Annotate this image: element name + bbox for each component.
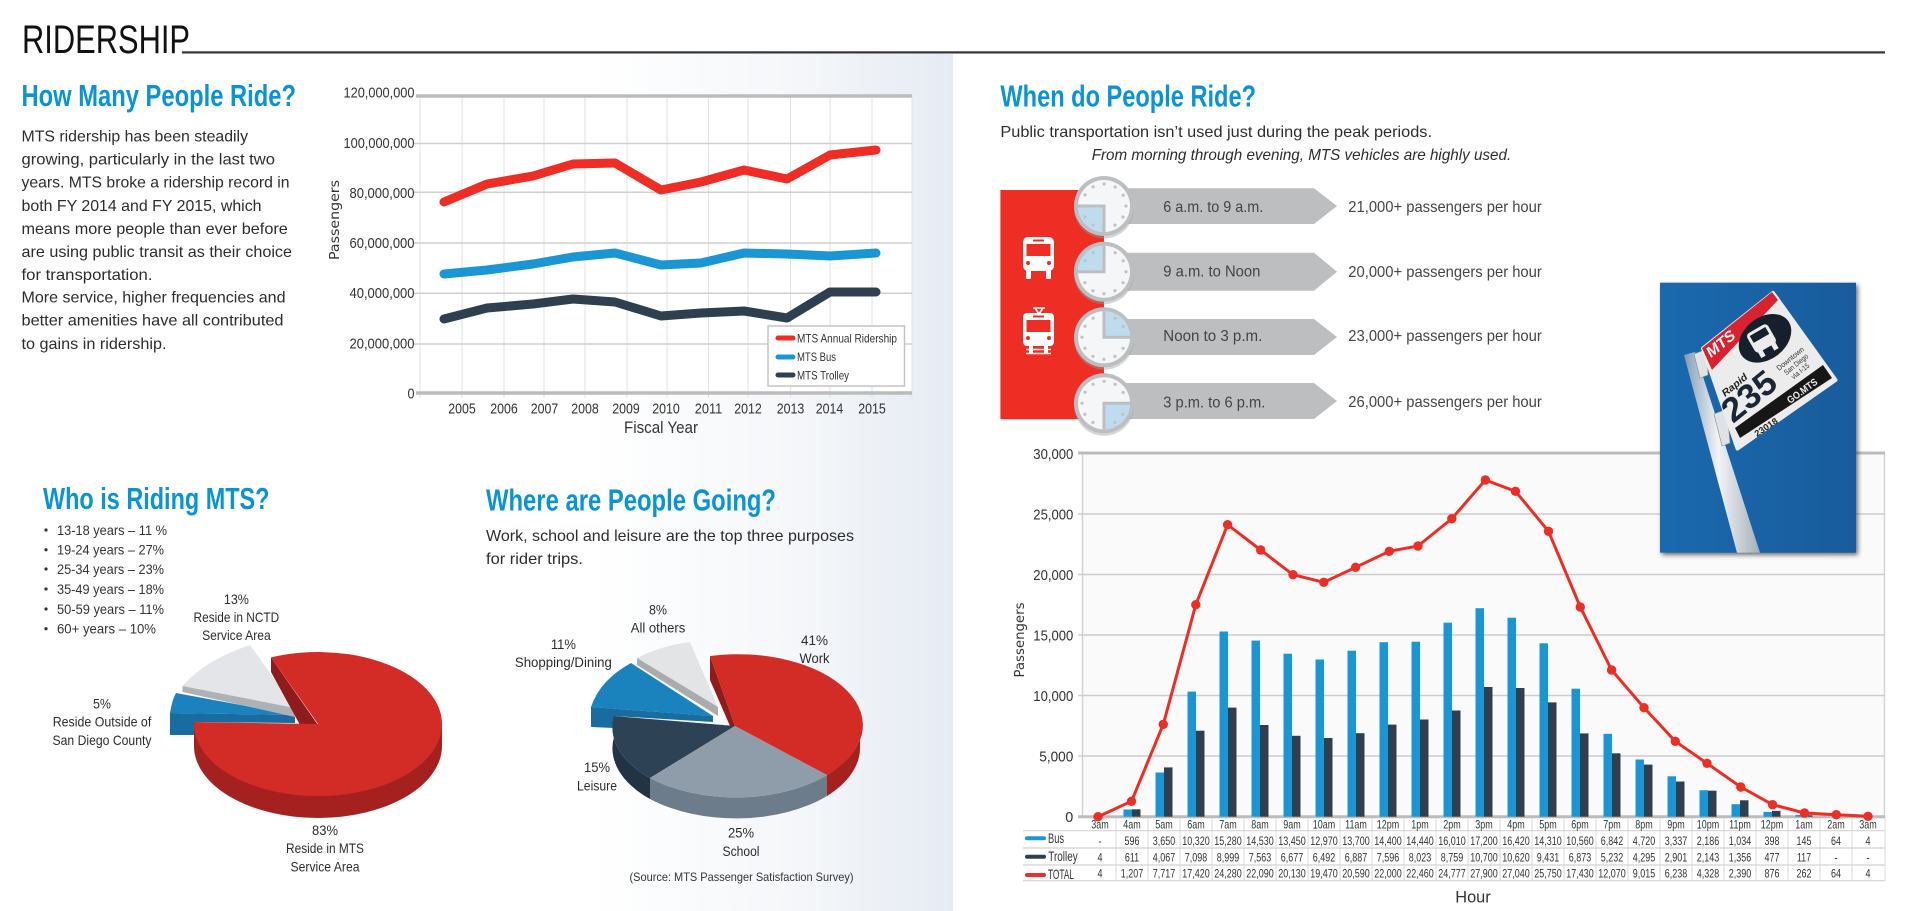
sign stop number: 23018 — [1753, 416, 1780, 439]
bars: bus — [1124, 608, 1804, 817]
data table: hourly passengers: 4,295 — [1633, 853, 1655, 865]
data table: hourly passengers: 12pm — [1377, 820, 1399, 832]
data table: hourly passengers: 64 — [1831, 836, 1841, 848]
y axis labels: 30,000 — [1033, 446, 1073, 463]
x axis labels: 2015 — [858, 400, 886, 417]
arrow: 9 a.m. to noon: 9 a.m. to Noon — [1163, 264, 1260, 281]
data table: hourly passengers: 2,186 — [1697, 836, 1719, 848]
sign pole — [1684, 352, 1760, 553]
y axis labels — [1033, 446, 1073, 826]
table legend: Bus — [1048, 830, 1064, 846]
y axis title: Passengers — [1013, 602, 1028, 678]
text block: intro: Public transportation isn’t used just during the peak periods. — [1000, 124, 1432, 141]
data table: hourly passengers: 4,328 — [1697, 868, 1719, 881]
data table: hourly passengers: 27,900 — [1470, 868, 1498, 881]
slice: outside San Diego County — [170, 693, 295, 735]
label: 5% outside county: 5% — [93, 696, 111, 712]
age group list: 50-59 years – 11% — [57, 601, 164, 617]
text block: ridership summary: means more people than ever before — [22, 221, 288, 238]
photo: bus stop sign — [1660, 283, 1858, 555]
data table: hourly passengers: 14,440 — [1406, 836, 1434, 848]
data table: hourly passengers: 17,430 — [1566, 868, 1594, 881]
data table: hourly passengers: 10,700 — [1470, 853, 1498, 865]
data table: hourly passengers: 10,620 — [1502, 853, 1530, 865]
data table: hourly passengers: 24,777 — [1438, 868, 1466, 881]
data table: hourly passengers: 14,310 — [1534, 836, 1562, 848]
series: MTS annual ridership — [444, 150, 876, 202]
data table: hourly passengers: 64 — [1831, 868, 1841, 881]
data table: hourly passengers: 8,999 — [1217, 853, 1239, 865]
data table: hourly passengers: 10am — [1313, 820, 1335, 832]
sign destination: Downtown — [1775, 345, 1806, 373]
data table: hourly passengers: 20,590 — [1342, 868, 1370, 881]
data table: hourly passengers: 262 — [1797, 868, 1812, 881]
data table: hourly passengers: 27,040 — [1502, 868, 1530, 881]
data table: hourly passengers: 17,200 — [1470, 836, 1498, 848]
y axis labels: 25,000 — [1033, 506, 1073, 524]
red block — [1000, 190, 1104, 419]
label: 25% school: School — [722, 843, 760, 859]
data table: hourly passengers: 13,700 — [1342, 836, 1370, 848]
text block: ridership summary: are using public transit as their choice — [22, 244, 292, 261]
data table: hourly passengers: 4,720 — [1633, 836, 1655, 848]
slice: work — [710, 654, 863, 796]
data table: hourly passengers: 3,337 — [1665, 836, 1687, 848]
data table: hourly passengers: 3am — [1091, 820, 1109, 832]
data table: hourly passengers: 8,023 — [1409, 853, 1431, 865]
data table: hourly passengers: 8am — [1251, 820, 1269, 832]
slice: shopping and dining — [591, 663, 713, 728]
data table: hourly passengers: 477 — [1765, 853, 1780, 865]
heading: who is riding: Who is Riding MTS? — [43, 481, 270, 516]
x axis labels: 2012 — [734, 400, 762, 417]
slice: NCTD service area — [182, 645, 295, 717]
text block: ridership summary: to gains in ridership. — [22, 336, 166, 353]
data table: hourly passengers: 7,098 — [1185, 853, 1207, 865]
data table: hourly passengers: 22,090 — [1246, 868, 1274, 881]
data table: hourly passengers: 13,450 — [1278, 836, 1306, 848]
data table: hourly passengers: 9am — [1283, 820, 1301, 832]
legend: MTS Trolley — [797, 368, 849, 382]
icon: bus — [1023, 237, 1054, 279]
data table: hourly passengers: 7pm — [1603, 820, 1621, 832]
bar and line chart: passengers by hour — [1013, 446, 1885, 826]
slice: MTS service area — [194, 652, 442, 818]
slice: school — [650, 726, 827, 818]
x axis labels: 2013 — [777, 400, 804, 417]
text block: italic intro: From morning through evening, MTS vehicles are highly used. — [1092, 147, 1511, 164]
heading: when do people ride: When do People Ride? — [1000, 78, 1256, 114]
arrow: 9 a.m. to noon — [1125, 253, 1337, 291]
data table: hourly passengers: 117 — [1797, 853, 1811, 865]
x axis labels: 2014 — [816, 400, 843, 417]
data table: hourly passengers: 4,067 — [1153, 853, 1175, 865]
arrow: 3 p.m. to 6 p.m. — [1125, 383, 1337, 419]
label: 15% leisure: 15% — [584, 759, 610, 775]
panel: where are people going — [486, 483, 863, 884]
data table: hourly passengers: 19,470 — [1310, 868, 1338, 881]
data table: hourly passengers: 17,420 — [1182, 868, 1210, 881]
text block: trip purposes — [486, 528, 854, 568]
data table: hourly passengers: 4am — [1123, 820, 1141, 832]
data table: hourly passengers: 4 — [1866, 868, 1871, 881]
arrow: noon to 3 p.m.: Noon to 3 p.m. — [1163, 328, 1262, 345]
legend — [768, 326, 904, 386]
y axis labels — [344, 84, 414, 402]
text block: ridership summary: for transportation. — [22, 267, 152, 284]
age group list: 60+ years – 10% — [57, 621, 156, 637]
data table: hourly passengers — [1023, 818, 1885, 882]
data table: hourly passengers: 10pm — [1697, 820, 1719, 832]
y axis labels: 40,000,000 — [350, 285, 414, 302]
data table: hourly passengers: 3,650 — [1153, 836, 1175, 848]
label: 8% all others — [631, 602, 685, 636]
sign brackets — [1694, 349, 1730, 446]
data table: hourly passengers: 12pm — [1761, 820, 1783, 832]
y axis labels: 15,000 — [1033, 628, 1073, 644]
data table: hourly passengers: 6,238 — [1665, 868, 1687, 881]
legend: MTS Annual Ridership — [797, 332, 897, 346]
data table: hourly passengers: 22,460 — [1406, 868, 1434, 881]
data table: hourly passengers: 6pm — [1571, 820, 1589, 832]
slice: leisure — [612, 716, 735, 799]
data table: hourly passengers: 6am — [1187, 820, 1205, 832]
label: 13% NCTD: Service Area — [202, 627, 271, 643]
y axis labels: 20,000,000 — [350, 336, 414, 352]
age group list: 13-18 years – 11 % — [57, 522, 167, 538]
data table: hourly passengers: 14,400 — [1374, 836, 1402, 848]
data table: hourly passengers: - — [1099, 836, 1101, 848]
arrow: 6 a.m. to 9 a.m.: 6 a.m. to 9 a.m. — [1163, 199, 1263, 216]
data table: hourly passengers: 2,901 — [1665, 853, 1687, 865]
data table: hourly passengers: 9pm — [1667, 820, 1685, 832]
age group list: 19-24 years – 27% — [57, 542, 164, 558]
data table: hourly passengers: 11pm — [1729, 820, 1751, 832]
heading: how many people ride: How Many People Ride? — [22, 78, 296, 113]
data table: hourly passengers: 9,015 — [1633, 868, 1655, 881]
line: total passengers — [1093, 475, 1873, 821]
sign red band — [1702, 292, 1778, 370]
age group list: 25-34 years – 23% — [57, 561, 164, 577]
panel: when do people ride — [1000, 78, 1885, 907]
x axis labels: 2009 — [612, 400, 640, 417]
label: 13% NCTD: Reside in NCTD — [194, 609, 279, 625]
data table: hourly passengers: 10,560 — [1566, 836, 1594, 848]
data table: hourly passengers: 2,143 — [1697, 853, 1719, 865]
data table: hourly passengers: 4 — [1866, 836, 1871, 848]
data table: hourly passengers: 8pm — [1635, 820, 1653, 832]
label: 83% MTS — [286, 822, 364, 875]
heading: where are people going: Where are People Going? — [486, 483, 776, 518]
data table: hourly passengers: 6,842 — [1601, 836, 1623, 848]
x axis title: hour: Hour — [1455, 888, 1491, 907]
y axis labels: 20,000 — [1033, 567, 1073, 584]
data table: hourly passengers: 1pm — [1411, 820, 1429, 832]
clock: noon to 3 — [1074, 307, 1134, 370]
text block: ridership summary: years. MTS broke a ridership record in — [22, 175, 290, 192]
label: 15% leisure — [577, 759, 617, 794]
sign web address: GO.MTS — [1785, 377, 1820, 406]
title rule — [182, 51, 1885, 54]
text block: trip purposes: for rider trips. — [486, 551, 583, 568]
text block: ridership summary: both FY 2014 and FY 2015, which — [22, 198, 262, 215]
data table: hourly passengers: 2,390 — [1729, 868, 1751, 881]
stat: 20,000+: 20,000+ passengers per hour — [1348, 264, 1542, 281]
label: 5% outside county: San Diego County — [52, 732, 152, 748]
sign destination: San Diego — [1782, 352, 1810, 377]
label: 83% MTS: 83% — [312, 822, 338, 838]
sign route number: 235 — [1714, 363, 1785, 430]
sign bus icon — [1729, 304, 1801, 373]
pie chart: trip purposes — [591, 642, 863, 818]
data table: hourly passengers: 10,320 — [1182, 836, 1210, 848]
data table: hourly passengers: 596 — [1125, 836, 1140, 848]
data table: hourly passengers: - — [1867, 853, 1869, 865]
slice: all others — [637, 642, 718, 716]
panel: how many people ride — [22, 78, 912, 437]
icon: trolley — [1023, 308, 1054, 354]
arrow: 3 p.m. to 6 p.m.: 3 p.m. to 6 p.m. — [1163, 394, 1265, 411]
data table: hourly passengers: - — [1835, 853, 1837, 865]
title: RIDERSHIP — [22, 18, 190, 62]
text block: ridership summary — [22, 129, 292, 353]
legend: MTS Bus — [797, 350, 836, 364]
x axis title: Fiscal Year — [624, 418, 698, 437]
data table: hourly passengers: 3am — [1859, 820, 1877, 832]
age group list — [44, 522, 167, 637]
label: 41% work — [800, 632, 830, 666]
bars: trolley — [1132, 687, 1812, 817]
stat: 23,000+: 23,000+ passengers per hour — [1348, 328, 1542, 345]
stat: 21,000+: 21,000+ passengers per hour — [1348, 199, 1542, 216]
data table: hourly passengers: 1,356 — [1729, 853, 1751, 865]
data table: hourly passengers: 22,000 — [1374, 868, 1402, 881]
background panel: left page gradient — [0, 54, 953, 911]
label: 41% work: 41% — [801, 632, 828, 648]
data table: hourly passengers: 145 — [1797, 836, 1812, 848]
data table: hourly passengers: 2pm — [1443, 820, 1461, 832]
data table: hourly passengers: 16,420 — [1502, 836, 1530, 848]
x axis labels: 2008 — [571, 400, 599, 417]
data table: hourly passengers: 5,232 — [1601, 853, 1623, 865]
label: 83% MTS: Reside in MTS — [286, 840, 364, 856]
y axis labels: 120,000,000 — [344, 84, 414, 102]
source note: (Source: MTS Passenger Satisfaction Survey) — [630, 870, 854, 884]
y axis labels: 80,000,000 — [350, 185, 414, 202]
data table: hourly passengers: 398 — [1765, 836, 1780, 848]
text block: ridership summary: better amenities have all contributed — [22, 313, 284, 330]
stat: 26,000+: 26,000+ passengers per hour — [1348, 394, 1542, 411]
label: 5% outside county: Reside Outside of — [53, 714, 151, 730]
y axis labels: 0 — [1065, 809, 1073, 826]
x axis labels: 2006 — [490, 400, 518, 417]
data table: hourly passengers: 12,970 — [1310, 836, 1338, 848]
y axis title: Passengers — [328, 180, 343, 260]
data table: hourly passengers: 24,280 — [1214, 868, 1242, 881]
label: 8% all others: 8% — [649, 602, 667, 618]
y axis labels: 10,000 — [1033, 688, 1073, 705]
series: MTS trolley — [444, 292, 876, 319]
label: 11% shopping — [515, 636, 612, 670]
data table: hourly passengers: 8,759 — [1441, 853, 1463, 865]
y axis labels: 5,000 — [1039, 748, 1073, 766]
text block: ridership summary: More service, higher frequencies and — [22, 290, 286, 307]
data table: hourly passengers: 15,280 — [1214, 836, 1242, 848]
table legend — [1027, 830, 1078, 882]
label: 15% leisure: Leisure — [577, 778, 617, 794]
data table: hourly passengers: 876 — [1765, 868, 1780, 881]
data table: hourly passengers: 5pm — [1539, 820, 1557, 832]
label: 5% outside county — [52, 696, 152, 748]
sign route name: Rapid — [1720, 371, 1751, 399]
label: 83% MTS: Service Area — [290, 859, 360, 875]
data table: hourly passengers: 1,207 — [1121, 868, 1143, 881]
data table: hourly passengers: 2am — [1827, 820, 1845, 832]
data table: hourly passengers: 7,563 — [1249, 853, 1271, 865]
data table: hourly passengers: 4 — [1098, 868, 1103, 881]
label: 25% school: 25% — [728, 825, 754, 841]
arrow: noon to 3 p.m. — [1125, 319, 1337, 355]
y axis labels: 100,000,000 — [344, 135, 414, 152]
label: 11% shopping: 11% — [551, 636, 576, 652]
data table: hourly passengers: 6,887 — [1345, 853, 1367, 865]
data table: hourly passengers: 5am — [1155, 820, 1173, 832]
panel: who is riding MTS — [43, 481, 442, 875]
label: 41% work: Work — [800, 650, 830, 666]
series: MTS bus — [444, 253, 876, 274]
label: 13% NCTD: 13% — [224, 591, 249, 607]
clock: 6 to 9 — [1074, 176, 1134, 238]
data table: hourly passengers: 6,677 — [1281, 853, 1303, 865]
y axis labels: 60,000,000 — [350, 235, 414, 252]
data table: hourly passengers: 6,873 — [1569, 853, 1591, 865]
table legend: TOTAL — [1048, 866, 1074, 882]
x axis labels: 2005 — [448, 400, 476, 417]
data table: hourly passengers: 611 — [1125, 853, 1139, 865]
data table: hourly passengers: 14,530 — [1246, 836, 1274, 848]
clock: 9 to noon — [1074, 242, 1134, 304]
data table: hourly passengers: 7,596 — [1377, 853, 1399, 865]
data table: hourly passengers: 1,034 — [1729, 836, 1751, 848]
table legend: Trolley — [1048, 848, 1078, 864]
x axis labels: 2011 — [695, 400, 722, 417]
clock: 3 to 6 — [1074, 373, 1134, 436]
sign black band — [1735, 365, 1832, 438]
sign plate — [1703, 293, 1836, 448]
age group list: 35-49 years – 18% — [57, 581, 164, 597]
arrow: 6 a.m. to 9 a.m. — [1125, 188, 1337, 224]
label: 8% all others: All others — [631, 620, 685, 636]
data table: hourly passengers: 6,492 — [1313, 853, 1335, 865]
label: 11% shopping: Shopping/Dining — [515, 654, 612, 670]
data table: hourly passengers: 12,070 — [1598, 868, 1626, 881]
data table: hourly passengers: 7,717 — [1153, 868, 1175, 881]
data table: hourly passengers: 11am — [1345, 820, 1367, 832]
label: 13% NCTD — [194, 591, 279, 643]
data table: hourly passengers: 25,750 — [1534, 868, 1562, 881]
data table: hourly passengers: 20,130 — [1278, 868, 1306, 881]
data table: hourly passengers: 16,010 — [1438, 836, 1466, 848]
data table: hourly passengers: 4pm — [1507, 820, 1525, 832]
x axis labels: 2007 — [531, 400, 558, 417]
label: 25% school — [722, 825, 760, 859]
sign MTS logo: MTS — [1703, 327, 1739, 361]
text block: ridership summary: MTS ridership has been steadily — [22, 129, 248, 146]
text block: ridership summary: growing, particularly in the last two — [22, 152, 275, 169]
data table: hourly passengers: 4 — [1098, 853, 1103, 865]
data table: hourly passengers: 9,431 — [1537, 853, 1559, 865]
data table: hourly passengers: 1am — [1795, 820, 1813, 832]
data table: hourly passengers: 7am — [1219, 820, 1237, 832]
sign destination — [1775, 345, 1816, 385]
sign destination: via I-15 — [1789, 361, 1811, 381]
x axis labels — [448, 400, 886, 417]
line chart: annual ridership — [328, 84, 912, 437]
text block: trip purposes: Work, school and leisure are the top three purposes — [486, 528, 854, 545]
pie chart: residence — [170, 645, 442, 818]
data table: hourly passengers: 3pm — [1475, 820, 1493, 832]
y axis labels: 0 — [408, 386, 414, 402]
x axis labels: 2010 — [652, 400, 680, 417]
